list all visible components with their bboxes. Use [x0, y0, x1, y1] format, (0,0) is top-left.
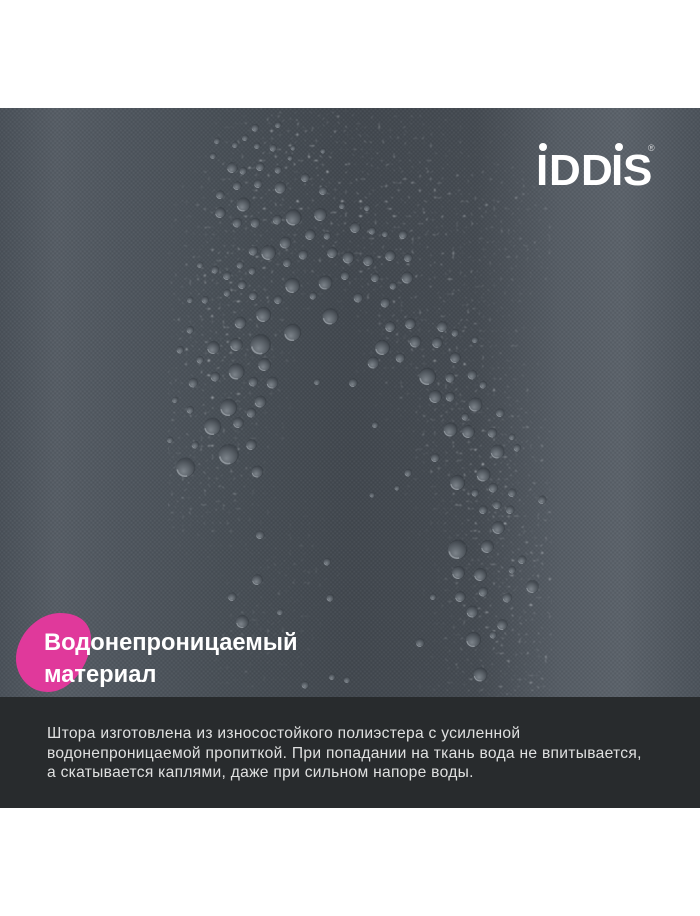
heading: Водонепроницаемый	[44, 630, 298, 656]
heading: материал	[44, 662, 156, 688]
description panel	[0, 697, 700, 808]
fabric background	[0, 108, 700, 697]
photo: grey fabric with water droplets	[0, 108, 700, 697]
pink blob accent	[16, 613, 92, 692]
description text: а скатывается каплями, даже при сильном напоре воды.	[47, 764, 474, 781]
water droplets	[167, 121, 547, 689]
logo: IDDIS: IDDIS	[536, 146, 652, 195]
heading	[44, 630, 298, 688]
description text	[47, 725, 642, 781]
logo: IDDIS: ®	[648, 143, 655, 153]
description text: водонепроницаемой пропиткой. При попадании на ткань вода не впитывается,	[47, 744, 642, 762]
description text: Штора изготовлена из износостойкого полиэстера с усиленной	[47, 725, 520, 742]
small droplet specks	[168, 108, 552, 697]
